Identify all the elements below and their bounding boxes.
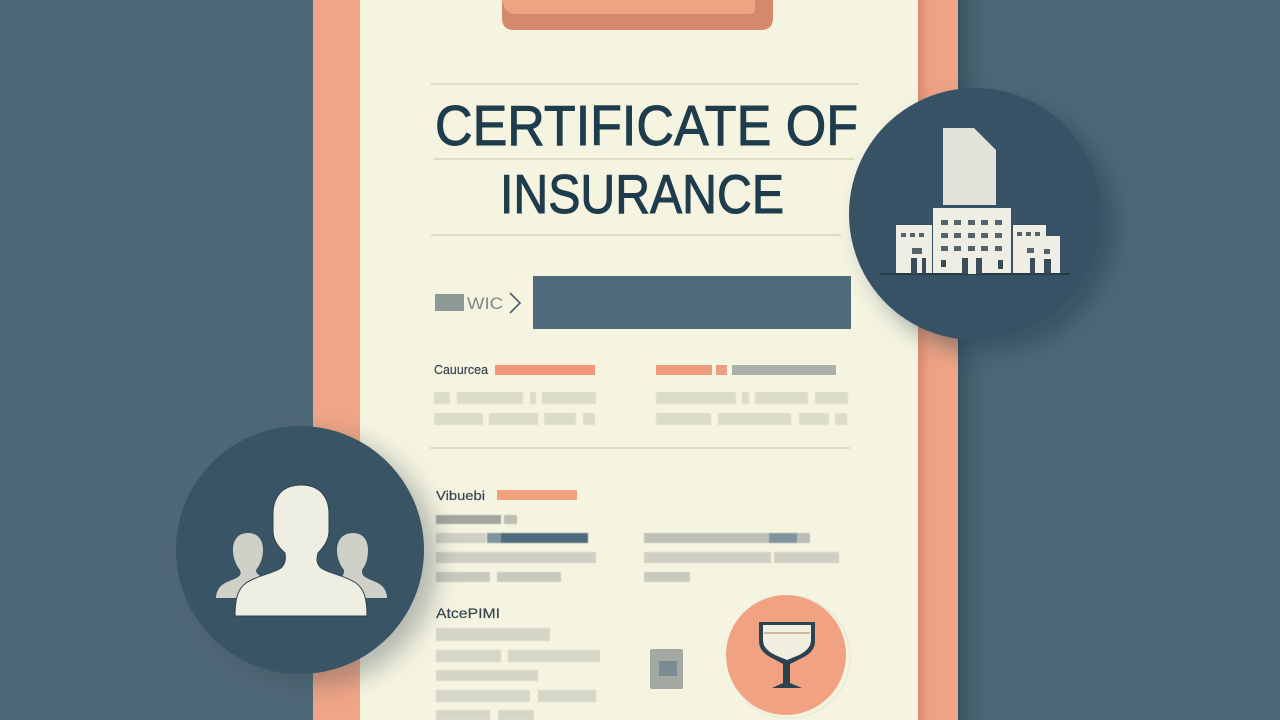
additional section xyxy=(436,605,600,720)
blurred text lines xyxy=(436,515,839,582)
badge shadow xyxy=(186,434,438,686)
cream paper xyxy=(360,0,918,720)
windows xyxy=(901,220,1050,254)
holder section: Vibuebi xyxy=(436,488,485,503)
badge disc xyxy=(849,88,1101,340)
peach document border xyxy=(313,0,958,720)
title xyxy=(431,83,858,236)
small stamp square xyxy=(650,649,683,689)
circle badge: building xyxy=(849,88,1116,352)
icon: wine glass seal xyxy=(726,595,850,718)
title: INSURANCE xyxy=(500,163,784,225)
icon: people group xyxy=(216,485,387,616)
badge shadow xyxy=(864,100,1116,352)
coverage section: Cauurcea xyxy=(434,362,489,377)
coverage section xyxy=(430,362,850,449)
icon: buildings xyxy=(880,128,1070,275)
insured name row: WIC xyxy=(467,294,503,313)
clip tab xyxy=(502,0,773,30)
blurred text lines xyxy=(436,628,600,720)
center person xyxy=(235,485,367,616)
additional section: AtcePIMI xyxy=(436,605,500,621)
left person xyxy=(216,533,263,598)
title: CERTIFICATE OF xyxy=(435,94,858,158)
doors xyxy=(911,258,1051,274)
circle badge: people xyxy=(176,426,438,686)
badge disc xyxy=(176,426,424,674)
certificate document xyxy=(313,0,958,720)
blurred text lines xyxy=(434,392,848,425)
holder section xyxy=(436,488,839,582)
insured name row xyxy=(435,276,851,329)
right person xyxy=(337,533,387,598)
